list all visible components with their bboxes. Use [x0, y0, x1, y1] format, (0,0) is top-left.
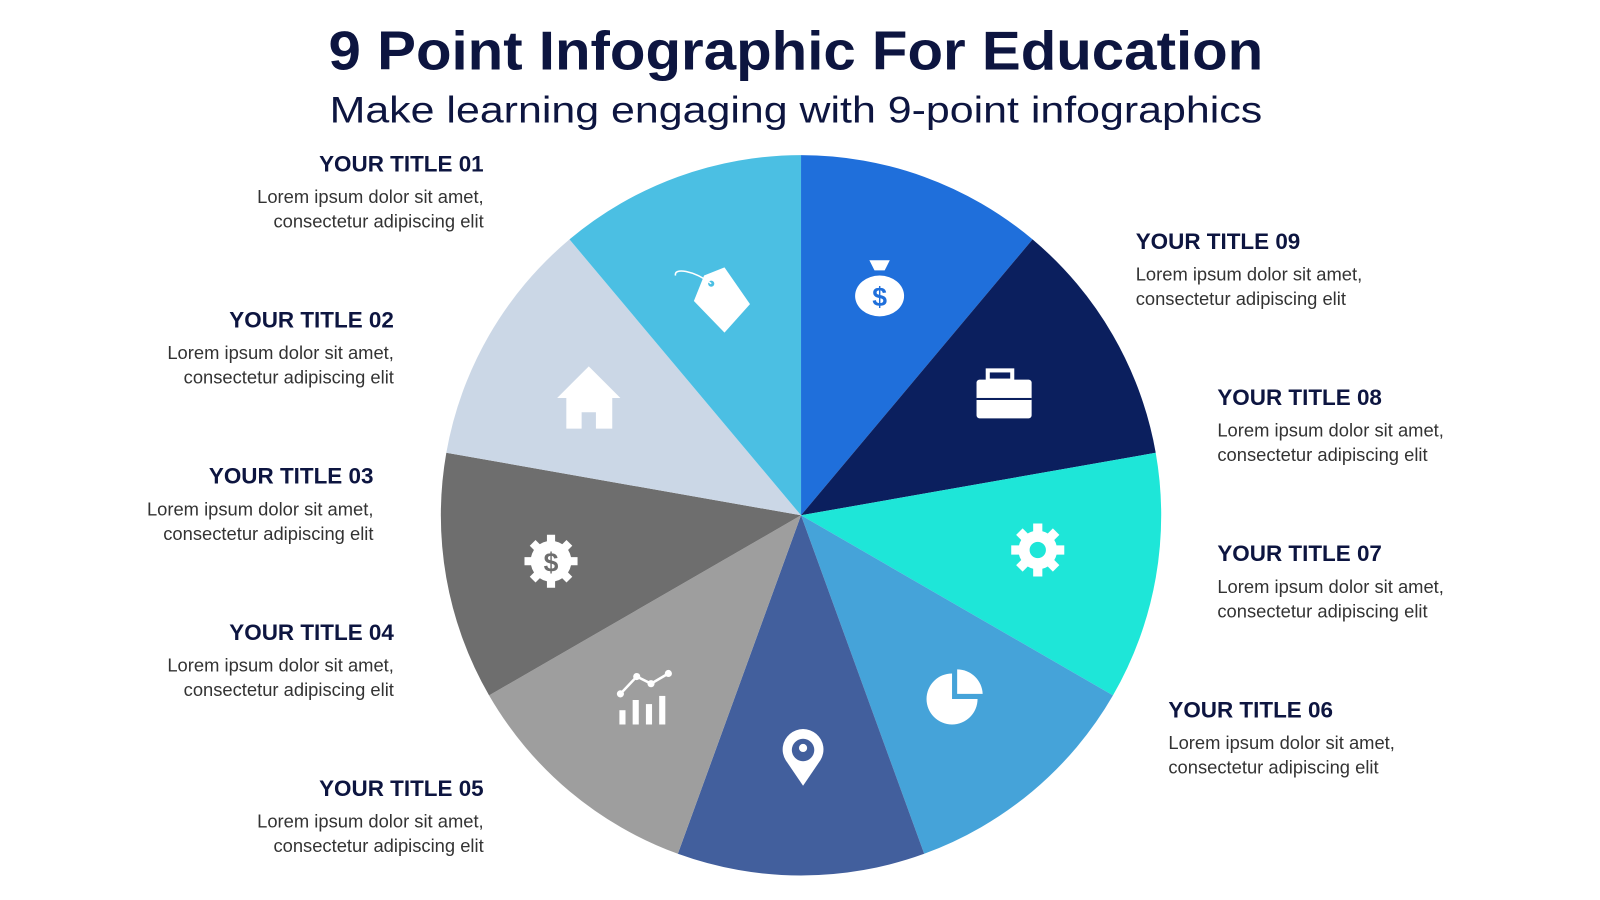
label 02: consectetur adipiscing elit [184, 367, 394, 388]
label 04: Lorem ipsum dolor sit amet, [167, 654, 394, 675]
icon: briefcase [977, 370, 1032, 418]
label 05 [257, 776, 484, 856]
label 05: Lorem ipsum dolor sit amet, [257, 811, 484, 832]
icon: pie chart [927, 669, 983, 724]
icon: tag [675, 267, 750, 333]
icon: gear dollar [524, 535, 578, 588]
label 05: consectetur adipiscing elit [273, 835, 484, 856]
icon: chart [617, 670, 672, 724]
label 07 [1217, 541, 1444, 621]
label 07: consectetur adipiscing elit [1217, 600, 1428, 621]
label 03: YOUR TITLE 03 [209, 464, 373, 489]
subtitle: Make learning engaging with 9-point infographics [330, 89, 1262, 130]
label 02: YOUR TITLE 02 [229, 308, 394, 333]
label 04 [167, 620, 394, 700]
label 06: YOUR TITLE 06 [1168, 697, 1333, 722]
label 01 [257, 151, 484, 232]
icon: location pin [783, 729, 823, 786]
label 01: Lorem ipsum dolor sit amet, [257, 186, 484, 207]
pie chart [441, 155, 1161, 875]
label 02 [167, 308, 394, 388]
label 08: consectetur adipiscing elit [1217, 444, 1428, 465]
title: 9 Point Infographic For Education [329, 19, 1263, 81]
label 09: consectetur adipiscing elit [1136, 288, 1346, 309]
label 01: consectetur adipiscing elit [273, 211, 484, 232]
label 09 [1136, 229, 1362, 309]
label 05: YOUR TITLE 05 [319, 776, 484, 801]
icon: money bag: $ [872, 282, 887, 312]
icon: house [557, 366, 620, 429]
label 07: Lorem ipsum dolor sit amet, [1217, 576, 1444, 597]
label 04: YOUR TITLE 04 [229, 620, 394, 645]
label 07: YOUR TITLE 07 [1217, 541, 1382, 566]
label 06: Lorem ipsum dolor sit amet, [1168, 732, 1395, 753]
label 06 [1168, 697, 1395, 777]
label 02: Lorem ipsum dolor sit amet, [167, 342, 394, 363]
label 03: Lorem ipsum dolor sit amet, [147, 498, 373, 519]
label 09: Lorem ipsum dolor sit amet, [1136, 264, 1362, 285]
icon: gear [1011, 523, 1064, 577]
label 08: YOUR TITLE 08 [1217, 385, 1382, 410]
icon: money bag [855, 260, 904, 316]
icon: gear dollar: $ [544, 547, 559, 577]
label 09: YOUR TITLE 09 [1136, 229, 1300, 254]
label 03: consectetur adipiscing elit [163, 523, 373, 544]
label 01: YOUR TITLE 01 [319, 151, 484, 176]
label 06: consectetur adipiscing elit [1168, 756, 1379, 777]
label 08: Lorem ipsum dolor sit amet, [1217, 420, 1444, 441]
label 04: consectetur adipiscing elit [184, 679, 394, 700]
label 03 [147, 464, 373, 544]
label 08 [1217, 385, 1444, 465]
